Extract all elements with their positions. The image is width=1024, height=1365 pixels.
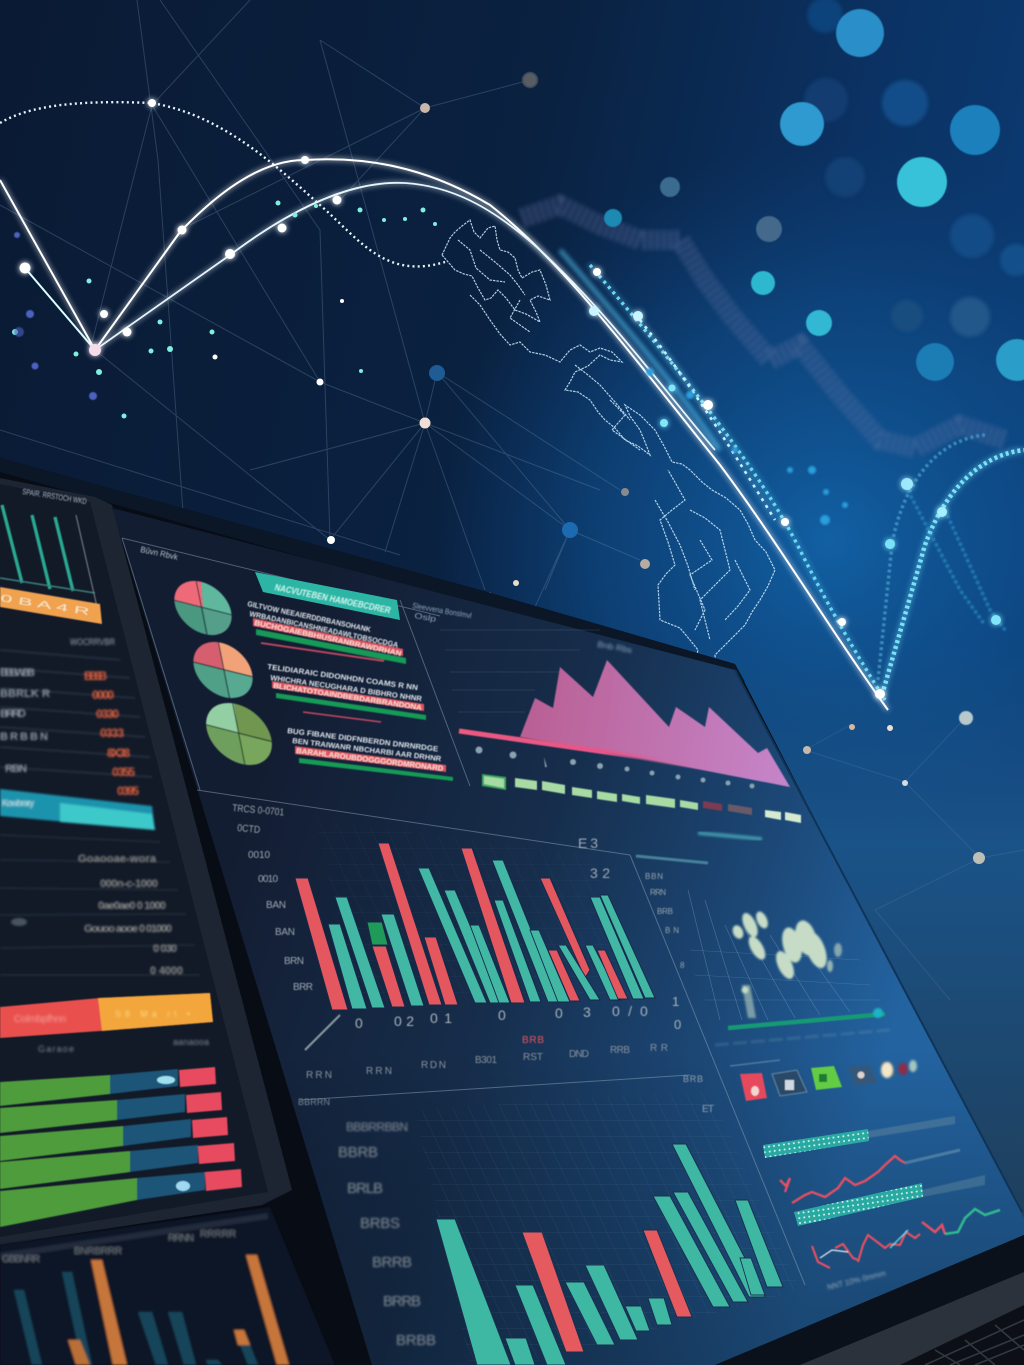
bar chart x axis labels: RRN (306, 1070, 332, 1081)
progress bar 1 (763, 1116, 955, 1158)
panel: bottom-left bar chart: RRRRR (200, 1229, 236, 1240)
bar chart heading and axis labels (232, 803, 610, 993)
red trend line 1 (780, 1150, 960, 1203)
bar chart x axis labels: 02 (394, 1013, 414, 1029)
left data table: 0395 (117, 784, 139, 798)
bar chart heading and axis labels: E 3 (578, 835, 598, 851)
teal banner heading (255, 572, 400, 620)
lower chart axis labels: BRLB (347, 1180, 383, 1197)
lower chart axis labels: BRRB (372, 1254, 412, 1271)
panel: bottom-left bar chart: RRNN (168, 1233, 194, 1244)
scatter sub-panel heading and axis (636, 833, 762, 970)
panel: left dashboard column: Garaoe (38, 1044, 74, 1054)
left red and orange band: S8 Ma rt • (115, 1009, 190, 1019)
area chart heading: Oslp (414, 611, 438, 624)
bar chart x axis labels: 0 (555, 1005, 563, 1021)
left teal banner (0, 789, 155, 830)
pie 3 (205, 702, 273, 766)
pie charts (174, 580, 273, 766)
bar chart x axis labels: 1 (672, 994, 679, 1009)
network: constellation lines (0, 0, 1024, 1000)
left data table: BRRD (0, 708, 26, 720)
panel: bottom-left bar chart: GBBNRR (2, 1254, 40, 1265)
left data table: 0333 (100, 726, 124, 740)
bar chart x axis labels: 0 (355, 1015, 363, 1031)
left data table (0, 637, 152, 798)
panel: left dashboard column: aanaooa (173, 1037, 209, 1047)
bar chart heading and axis labels: 0010 (258, 874, 278, 885)
left list rows: 0 4000 (150, 965, 183, 977)
infographic: analytics dashboard on a monitor below a glowing network: NNT 10% 0mmm (826, 1269, 887, 1292)
bar chart x axis labels: BRB (522, 1035, 544, 1046)
left list rows: 0ae0ae0 0 1000 (98, 900, 166, 912)
scatter sub-panel heading and axis: RRN (650, 888, 666, 897)
bokeh lights (522, 0, 1024, 381)
bar chart x axis labels: ET (702, 1104, 714, 1115)
bar chart heading and axis labels: 0010 (248, 850, 270, 861)
dotted curve (0, 102, 445, 266)
lower chart axis labels: BBRB (338, 1144, 378, 1161)
area chart heading: Bnb Rbs (597, 640, 633, 655)
bar chart heading and axis labels: 3 2 (590, 865, 610, 881)
bar chart x axis labels: RRB (610, 1045, 630, 1056)
bar chart heading and axis labels: BAN (275, 927, 295, 938)
left list rows: Gouoo aooe 0 01000 (84, 923, 172, 935)
bar chart x axis labels: BRB (683, 1074, 703, 1084)
glowing data curves (0, 159, 1024, 710)
legend block 3: BEN TRAIWANR NBCHARBI AAR DRHNR (292, 736, 442, 763)
legend block 2: TELIDIARAIC DIDONHDN COAMS R NN (267, 662, 418, 692)
legend block 1: WRBADANBICANSHNEADAWLTOBSOCDGA (249, 609, 400, 650)
left data table: RBN (5, 763, 27, 775)
bar chart x axis labels: 0 (674, 1017, 681, 1032)
toolbar icons (730, 1060, 917, 1101)
legend block 1: GILTVOW NEEAIERDDRBANSOHANK (247, 599, 372, 634)
progress bar 2 (794, 1175, 985, 1226)
area chart heading: Sleevvena Bonslmvl (412, 601, 472, 620)
lower chart axis labels: BRBS (360, 1215, 400, 1232)
bar chart x axis labels: 3 (583, 1004, 591, 1020)
left top mini chart: 0 B A 4 R (0, 593, 90, 618)
legend block 3: BUG FIBANE DIDFNBERDN DNRNRDGE (287, 726, 439, 754)
lower chart axis labels: BRRB (383, 1293, 421, 1310)
bar chart x axis labels: 01 (430, 1010, 452, 1026)
left data table: 0330 (96, 707, 119, 721)
bar chart x axis labels: B301 (475, 1055, 497, 1066)
faint wave behind the main curve (522, 205, 1005, 448)
legend block 2: WHICHRA NECUGHARA D BIBHRO NHNR (270, 673, 423, 703)
world map outline (442, 220, 775, 698)
scatter chart (688, 890, 890, 1045)
teal banner heading: NACVUTEBEN HAMOEBCDRER (273, 582, 392, 616)
main multi-series bar chart (295, 820, 660, 1010)
lower bar chart (415, 1090, 800, 1365)
laptop base and keyboard (715, 1235, 1024, 1365)
left red and orange band (0, 993, 213, 1038)
left data table: 0355 (112, 765, 135, 779)
bar chart x axis labels: RST (523, 1052, 543, 1063)
panel title: Bûvn Rbvk (140, 544, 180, 562)
left top mini chart: SPAIR. RRSTOCH WKD (22, 487, 87, 506)
left data table: 0000 (92, 688, 114, 702)
bar chart heading and axis labels: BRN (284, 956, 304, 967)
left green status rows (0, 1067, 242, 1227)
panel: left dashboard column (0, 478, 292, 1245)
bar chart x axis labels: 0 (498, 1007, 506, 1023)
bar chart x axis labels: BBRRN (298, 1097, 330, 1107)
legend block 3: BARAHLAROUBDOGGGORDMRONARD (296, 746, 444, 773)
legend block 1: BUCHOGAIEBBHIUSRANBRAWDRHAN (254, 618, 402, 658)
left data table: 8X38 (107, 746, 130, 760)
lower chart axis labels (338, 1120, 436, 1349)
left top mini chart (0, 487, 102, 624)
metric icons and chips row (476, 746, 801, 823)
left data table: BBRLK R (0, 688, 50, 700)
panel: bottom-left bar chart: BNRBRRR (74, 1246, 122, 1257)
bar chart x axis labels: 0/ (612, 1003, 632, 1019)
bar chart heading and axis labels: TRCS 0-0701 (232, 803, 285, 819)
scatter sub-panel heading and axis: BN (665, 926, 679, 935)
pie legend text blocks (247, 599, 453, 781)
left list rows: Goaooae-wora (78, 853, 157, 865)
multi-colour trend line 2 (812, 1209, 1000, 1268)
bar chart x axis labels: 0 (640, 1003, 648, 1019)
bar chart heading and axis labels: BRR (293, 982, 313, 993)
legend block 3 (287, 726, 453, 781)
left list rows: 000n-c-1000 (100, 878, 158, 890)
bar chart x axis labels (298, 994, 714, 1115)
bar chart x axis labels: DND (569, 1049, 589, 1060)
pie 1 (174, 580, 232, 636)
left data table: BBB WBB (0, 667, 35, 679)
pie 2 (192, 641, 254, 699)
bar chart heading and axis labels: BAN (266, 900, 286, 911)
area chart heading (412, 601, 633, 655)
panel: bottom-left bar chart (0, 1207, 335, 1365)
left data table: BRBBN (0, 731, 48, 743)
bar chart x axis labels: RR (650, 1043, 668, 1054)
monitor frame (0, 458, 1024, 1365)
legend block 1 (247, 599, 406, 664)
scatter sub-panel heading and axis: 8 (680, 961, 685, 970)
left list rows (0, 835, 200, 977)
bar chart x axis labels: RDN (421, 1060, 446, 1071)
left data table: BBSB (84, 669, 107, 683)
bar chart x axis labels: RRN (366, 1066, 392, 1077)
legend block 2 (267, 662, 426, 722)
left data table: WOCRRVBR (70, 637, 115, 647)
legend block 2: BLICHATOTOAINDBEBDARBRANDONA (273, 681, 423, 712)
left list rows: 0 030 (153, 943, 177, 955)
lower chart axis labels: BRBB (396, 1332, 436, 1349)
scatter sub-panel heading and axis: BBN (645, 872, 663, 881)
bar chart heading and axis labels: 0CTD (237, 823, 261, 836)
pink area chart (440, 630, 790, 787)
left teal banner: Kowbrary (2, 798, 34, 808)
network nodes (12, 74, 1001, 881)
scatter sub-panel heading and axis: BRB (657, 907, 673, 916)
panel: main dashboard screen (112, 508, 1024, 1365)
left red and orange band: Colmbpfhnn (14, 1014, 66, 1025)
lower chart axis labels: BBBRRBBN (346, 1120, 408, 1134)
